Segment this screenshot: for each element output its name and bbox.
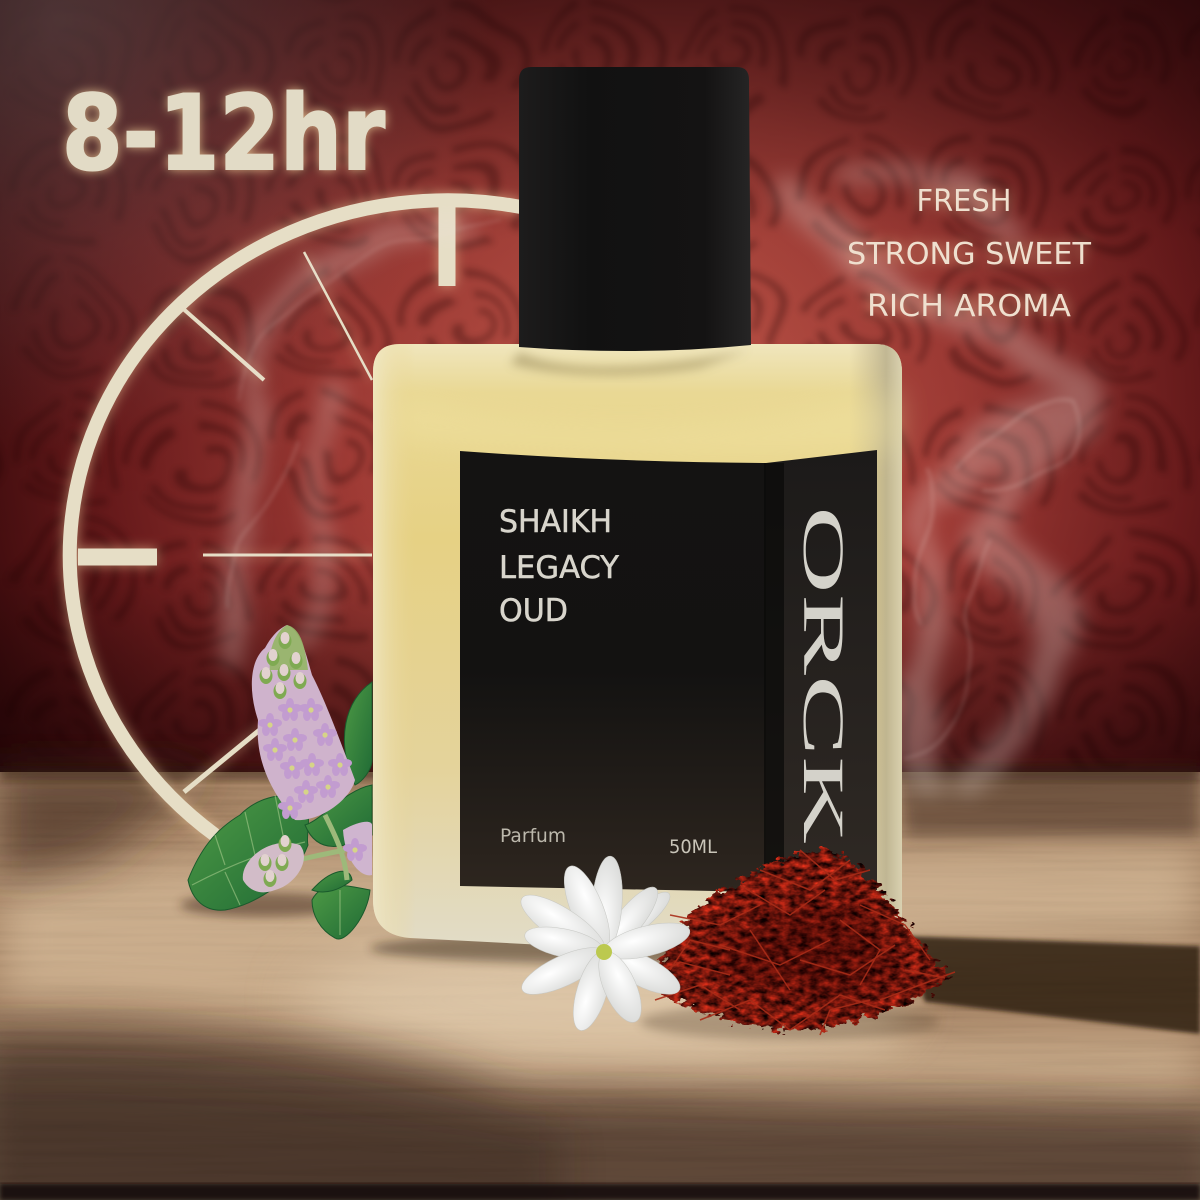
scent notes text [847,184,1092,324]
product name: LEGACY [499,550,619,586]
bottle cap [519,67,751,351]
label [460,450,877,892]
perfume bottle [370,67,910,964]
background: red patterned wall [0,0,1200,800]
light beam [0,845,1200,1095]
wooden table with spotlight [0,766,1200,1200]
mint leaves [188,682,372,939]
scent notes text: STRONG SWEET [847,237,1092,272]
bottle shadow [370,932,910,964]
saffron pile [640,850,955,1040]
product name: OUD [499,593,568,629]
lower flower heads [243,822,372,892]
product name: SHAIKH [499,504,612,540]
volume text: 50ML [669,836,717,858]
bottle glass body [373,344,902,950]
scent notes text: FRESH [916,184,1012,219]
leaf veins [192,795,340,935]
smoke wisps [234,171,1086,780]
white jasmine flower [513,855,693,1035]
mint sprig with flowers [180,625,372,939]
title: duration: 8-12hr [62,74,385,194]
saffron strands [640,850,955,1035]
stems [270,815,347,880]
leaf shadow [180,893,350,917]
clock dial with hour marks [70,196,521,835]
lower dark area [0,1028,1200,1200]
parfum text: Parfum [500,825,566,847]
saffron shadow [640,1004,940,1040]
bottle cast shadow [905,936,1200,1034]
brand wordmark vertical: ORCK [791,506,856,844]
saffron texture [650,850,948,1030]
product name [499,504,619,629]
scent notes text: RICH AROMA [867,289,1071,324]
dark upper table areas [0,768,215,880]
purple flower spike [252,625,355,820]
